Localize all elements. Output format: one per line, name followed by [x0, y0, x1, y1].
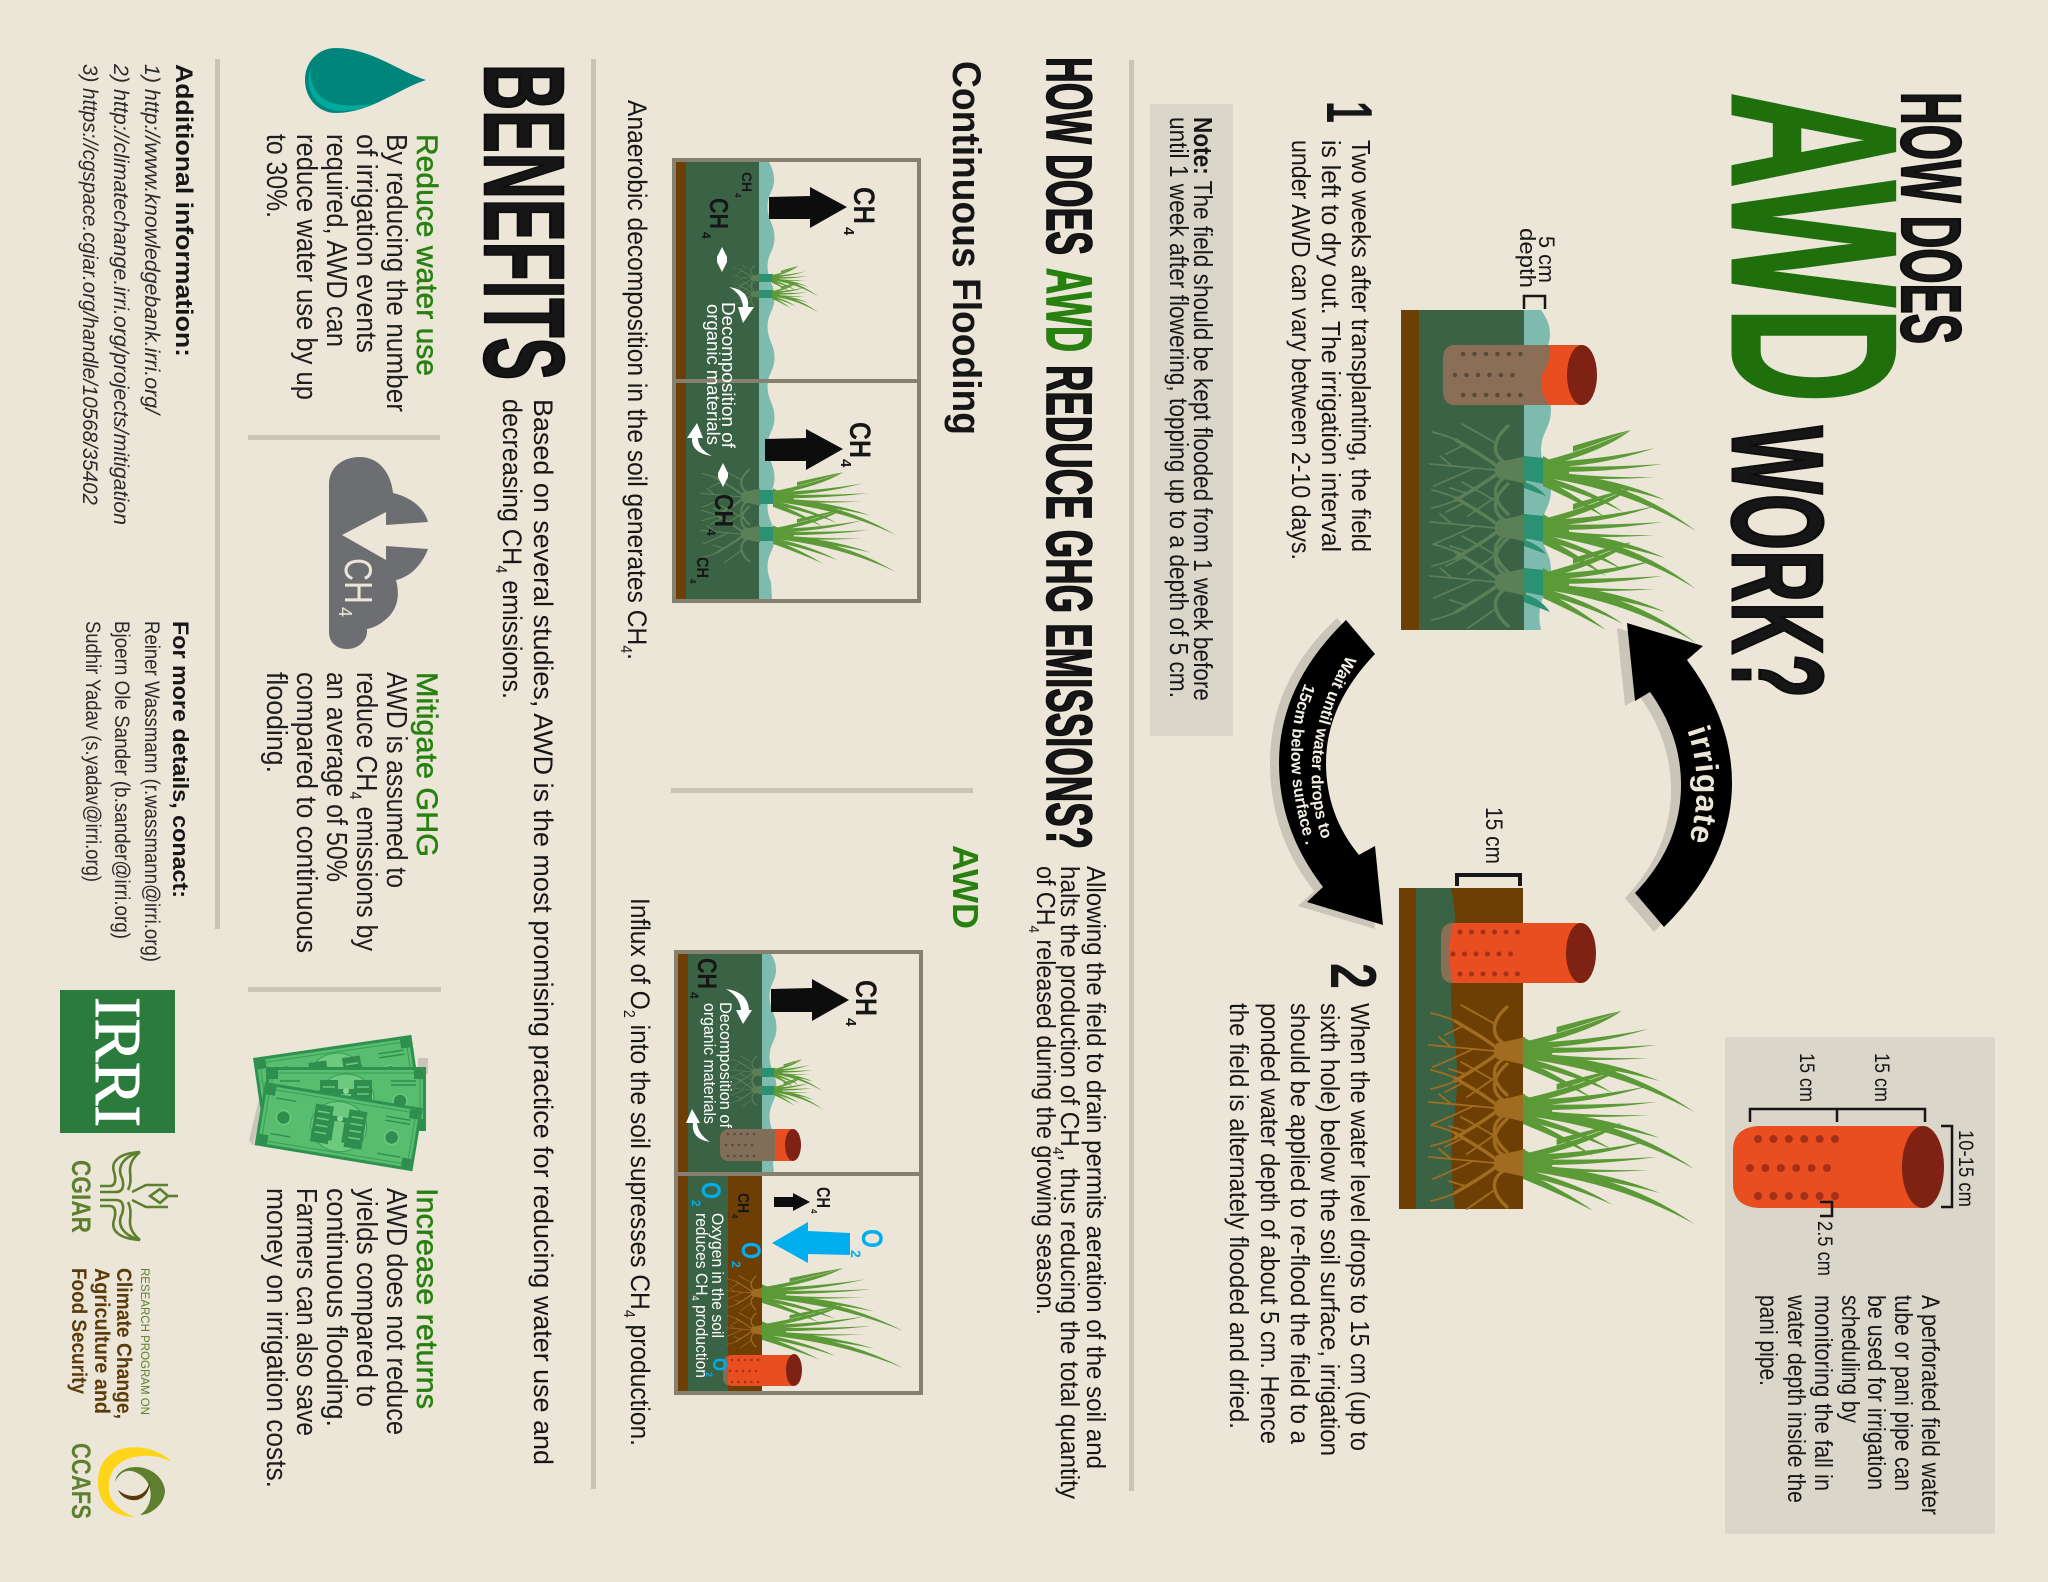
step 1 text: Two weeks after transplanting, the field: [1346, 140, 1376, 552]
CH4 labels: 4: [687, 992, 701, 999]
5 cm depth label: [1515, 228, 1559, 309]
benefit: mitigate GHG: 4: [346, 791, 365, 800]
CH4 labels: CH: [843, 422, 876, 458]
contact details: For more details, conact:: [168, 621, 193, 898]
caption: anaerobic decomposition: 4: [617, 645, 634, 653]
logo: CGIAR: [66, 1152, 178, 1240]
logo text: CCAFS research program: Agriculture and: [90, 1268, 113, 1414]
step 1 text: [1286, 140, 1376, 560]
CH4 arrows up: [765, 187, 847, 470]
logo: CCAFS: [66, 1443, 172, 1519]
CH4 labels: CH: [693, 557, 712, 578]
icon: CH4 cloud: CH: [336, 558, 379, 604]
pipe description text: monitoring the fall in: [1809, 1295, 1837, 1491]
decomposition label: [700, 1002, 735, 1128]
note box: Note: The field should be kept flooded from 1 week before: [1188, 117, 1218, 701]
benefit: increase returns: continuous flooding.: [320, 1188, 352, 1427]
logo: IRRI: [60, 990, 175, 1133]
benefit: reduce water use: Reduce water use: [410, 134, 443, 376]
arrow: O2 into soil: [772, 1222, 850, 1263]
text: allowing the field to drain: [1025, 866, 1111, 1499]
rice plants: [1524, 430, 1696, 643]
contact details: Bjoern Ole Sander (b.sander@irri.org): [110, 621, 133, 939]
step 1 text: under AWD can vary between 2-10 days.: [1286, 140, 1316, 560]
CH4 labels: 4: [837, 459, 854, 468]
logo text: CCAFS research program: RESEARCH PROGRAM ON: [138, 1268, 152, 1415]
dimension labels: 2.5 cm: [1813, 1221, 1836, 1276]
oxygen label: Oxygen in the soil: [708, 1213, 727, 1338]
logo text: CCAFS research program: [67, 1268, 152, 1419]
pipe description text: A perforated field water: [1916, 1295, 1944, 1515]
CH4 labels: CH: [847, 187, 880, 224]
subheading: AWD: AWD: [945, 845, 986, 929]
CH4 labels: CH: [692, 958, 722, 989]
dimension labels: 10-15 cm: [1954, 1130, 1977, 1207]
oxygen label: production: [692, 1301, 711, 1378]
15 cm label: 15 cm: [1480, 807, 1507, 864]
roots: [1430, 424, 1526, 628]
logo: CCAFS: CCAFS: [66, 1443, 96, 1519]
text: benefits intro: decreasing CH: [497, 399, 527, 578]
subheading: continuous flooding: Continuous Flooding: [944, 61, 988, 435]
5 cm depth label: depth: [1515, 228, 1540, 288]
CH4 labels: CH: [849, 980, 882, 1016]
panel: continuous flooding diagram: [674, 160, 919, 601]
title: How does AWD work?: AWD: [1683, 92, 1946, 403]
step 2 text: When the water level drops to 15 cm (up to: [1345, 1003, 1375, 1451]
caption: influx of O2: Influx of O: [625, 898, 655, 1021]
step 1 number: 1: [1313, 101, 1386, 123]
pipe description text: tube or pani pipe can: [1889, 1295, 1917, 1491]
caption: influx of O2: 2: [620, 1010, 637, 1018]
text: benefits intro: 4: [492, 565, 509, 574]
benefit: mitigate GHG: compared to continuous: [290, 672, 322, 953]
additional information: [78, 63, 197, 525]
dimension brackets: [1750, 1109, 1952, 1216]
white arrows: [687, 247, 754, 487]
divider: [215, 59, 220, 929]
15 cm label: [1457, 807, 1520, 886]
rice plants: [762, 1059, 903, 1368]
additional information: 1) http://www.knowledgebank.irri.org/: [140, 64, 163, 416]
pipes: [720, 1129, 802, 1386]
pipe in drained soil: [1441, 923, 1596, 983]
benefit: mitigate GHG: AWD is assumed to: [380, 672, 412, 888]
O2 labels: [689, 1182, 888, 1377]
divider: [248, 435, 440, 440]
title: How does AWD work?: WORK?: [1705, 426, 1849, 698]
benefit: increase returns: [260, 1188, 443, 1488]
text: allowing the field to drain: , thus reducing the total quantity: [1055, 1155, 1085, 1499]
rice plants: [1523, 1011, 1694, 1224]
heading: how does AWD reduce GHG emissions: AWD: [1033, 268, 1105, 352]
icon: banknotes: [249, 1035, 428, 1171]
benefit: reduce water use: [260, 134, 443, 412]
O2 labels: 2: [704, 1372, 714, 1377]
arrow: wait until water drops: 15cm below surface .: [1291, 684, 1314, 844]
benefit: mitigate GHG: reduce CH: [350, 672, 382, 811]
panel: pani pipe explanation: [1725, 1037, 1995, 1534]
soil and water: [1401, 310, 1551, 630]
CH4 labels: 4: [730, 1214, 739, 1219]
pipe description text: [1754, 1294, 1944, 1515]
text: allowing the field to drain: 4: [1025, 926, 1042, 933]
text: allowing the field to drain: halts the production of CH: [1055, 866, 1085, 1167]
note box: [1150, 104, 1233, 736]
heading: how does AWD reduce GHG emissions: HOW DOES: [1033, 57, 1105, 255]
CH4 labels: CH: [709, 494, 739, 527]
arrow: irrigate: irrigate: [1688, 724, 1720, 842]
benefit: increase returns: Increase returns: [410, 1188, 443, 1409]
logo text: CCAFS research program: Climate Change,: [112, 1268, 135, 1419]
text: allowing the field to drain: released during the growing season.: [1031, 933, 1061, 1315]
CH4 labels: 4: [842, 1018, 859, 1027]
benefit: reduce water use: reduce water use by up: [290, 134, 322, 400]
soil and water: [678, 954, 776, 1392]
dimension labels: 15 cm: [1870, 1053, 1893, 1102]
roots: [1429, 1005, 1525, 1209]
CH4 labels: 4: [840, 227, 857, 236]
O2 labels: O: [708, 1358, 730, 1371]
note box: until 1 week after flowering, topping up to a depth of 5 cm.: [1164, 117, 1194, 698]
logo: IRRI: IRRI: [81, 997, 154, 1127]
frame: [676, 952, 921, 1393]
text: allowing the field to drain: Allowing the field to drain permits aeration of the soil and: [1081, 866, 1111, 1469]
roots: [701, 265, 760, 563]
icon: CH4 cloud: [329, 457, 428, 649]
icon: perforated pipe: [1733, 1126, 1944, 1208]
benefit: increase returns: Farmers can also save: [290, 1188, 322, 1436]
benefit: mitigate GHG: emissions by: [350, 800, 382, 951]
step 1 text: is left to dry out. The irrigation interval: [1316, 140, 1346, 552]
caption: influx of O2: into the soil supresses CH: [625, 1018, 655, 1310]
benefit: increase returns: yields compared to: [350, 1188, 382, 1407]
arrow: irrigate: [1617, 623, 1732, 932]
benefit: reduce water use: required, AWD can: [320, 134, 352, 347]
step 2 number: 2: [1317, 963, 1390, 989]
text: benefits intro: emissions.: [497, 573, 527, 699]
divider: [671, 788, 973, 793]
pipe description text: be used for irrigation: [1862, 1295, 1890, 1490]
benefit: mitigate GHG: an average of 50%: [320, 672, 352, 882]
5 cm depth label: 5 cm: [1534, 236, 1559, 283]
CH4 arrows: [771, 979, 849, 1211]
caption: influx of O2: 4: [620, 1310, 637, 1318]
logo text: CCAFS research program: Food Security: [67, 1268, 90, 1394]
dimension labels: [1795, 1053, 1977, 1276]
pipe description text: scheduling by: [1836, 1295, 1864, 1423]
panel: AWD diagram: [676, 952, 921, 1393]
CH4 labels: CH: [739, 172, 755, 192]
decomposition label: Decomposition of: [718, 302, 738, 449]
rice plants: [759, 266, 895, 572]
icon: water drop: [305, 48, 426, 113]
frame: [674, 160, 919, 601]
text: benefits intro: [492, 399, 558, 1465]
dimension labels: 15 cm: [1795, 1053, 1818, 1102]
CH4 labels: [688, 172, 880, 584]
O2 labels: 2: [689, 1200, 703, 1207]
title: How does AWD work?: HOW DOES: [1884, 92, 1978, 344]
additional information: 2) http://climatechange.irri.org/projects/mitigation: [109, 63, 132, 525]
CH4 labels: 4: [809, 1209, 818, 1214]
benefit: mitigate GHG: flooding.: [260, 672, 292, 773]
contact details: Reiner Wassmann (r.wassmann@irri.org): [140, 621, 163, 962]
CH4 labels: CH: [813, 1187, 833, 1208]
caption: anaerobic decomposition: .: [622, 653, 652, 660]
CH4 labels: CH: [734, 1193, 751, 1213]
step 2 text: should be applied to re-flood the field to a: [1285, 1003, 1315, 1444]
step 2 field illustration: [1399, 807, 1694, 1224]
additional information: 3) https://cgspace.cgiar.org/handle/10568/35402: [78, 64, 101, 505]
roots: [726, 1056, 763, 1347]
O2 labels: O: [736, 1242, 766, 1259]
oxygen label: [689, 1213, 727, 1378]
benefit: mitigate GHG: Mitigate GHG: [410, 672, 443, 857]
heading: how does AWD reduce GHG emissions: [1033, 57, 1105, 849]
benefit: reduce water use: to 30%.: [260, 134, 292, 218]
O2 labels: 2: [729, 1261, 743, 1268]
logo: CGIAR: CGIAR: [66, 1160, 96, 1233]
caption: anaerobic decomposition: Anaerobic decomposition in the soil generates CH: [622, 100, 652, 699]
CH4 labels: [687, 958, 882, 1219]
CH4 labels: 4: [688, 579, 697, 584]
arrow: wait until water drops: [1270, 618, 1383, 929]
contact details: Sudhir Yadav (s.yadav@irri.org): [81, 621, 104, 882]
step 2 text: ponded water depth of about 5 cm. Hence: [1255, 1003, 1285, 1444]
contact details: [81, 621, 193, 962]
white arrows: [686, 989, 752, 1142]
decomposition label: organic materials: [703, 304, 723, 445]
CH4 labels: 4: [699, 232, 713, 239]
step 1 field illustration: [1401, 228, 1696, 643]
step 2 text: the field is alternately flooded and dried.: [1224, 1003, 1254, 1429]
divider: [591, 59, 596, 1489]
benefit: increase returns: money on irrigation costs.: [260, 1188, 292, 1488]
O2 labels: O: [855, 1229, 888, 1248]
soil: [1399, 888, 1523, 1209]
step 2 text: [1224, 1003, 1375, 1456]
pipe description text: water depth inside the: [1782, 1294, 1810, 1503]
pipe in flooded soil: [1443, 345, 1597, 405]
CH4 labels: 4: [733, 193, 742, 198]
additional information: Additional information:: [170, 64, 197, 357]
step 2 text: sixth hole) below the soil surface, irrigation: [1315, 1003, 1345, 1456]
text: benefits intro: Based on several studies, AWD is the most promising practice for reducing water use and: [528, 399, 558, 1465]
heading: benefits: BENEFITS: [461, 64, 587, 380]
benefit: reduce water use: of irrigation events: [350, 134, 382, 353]
benefit: increase returns: AWD does not reduce: [380, 1188, 412, 1435]
CH4 labels: CH: [704, 198, 734, 229]
text: allowing the field to drain: 4: [1049, 1147, 1066, 1155]
icon: CH4 cloud: 4: [335, 607, 355, 617]
O2 labels: O: [696, 1182, 726, 1199]
CH4 labels: 4: [704, 529, 718, 536]
heading: how does AWD reduce GHG emissions: REDUCE GHG EMISSIONS?: [1033, 365, 1105, 849]
oxygen label: 4: [689, 1296, 700, 1301]
soil and water: [676, 162, 774, 600]
caption: influx of O2: production.: [625, 1318, 655, 1446]
O2 labels: 2: [848, 1250, 864, 1258]
benefit: mitigate GHG: [260, 672, 443, 953]
pipe description text: pani pipe.: [1754, 1295, 1782, 1386]
text: allowing the field to drain: of CH: [1031, 866, 1061, 932]
benefit: reduce water use: By reducing the number: [380, 134, 412, 412]
oxygen label: reduces CH: [692, 1213, 711, 1303]
divider: [1129, 60, 1134, 1491]
decomposition label: organic materials: [700, 1003, 719, 1124]
decomposition label: [703, 302, 738, 449]
arrow: wait until water drops: Wait until water drops to: [1310, 658, 1357, 838]
decomposition label: Decomposition of: [716, 1002, 735, 1128]
divider: [248, 987, 441, 992]
